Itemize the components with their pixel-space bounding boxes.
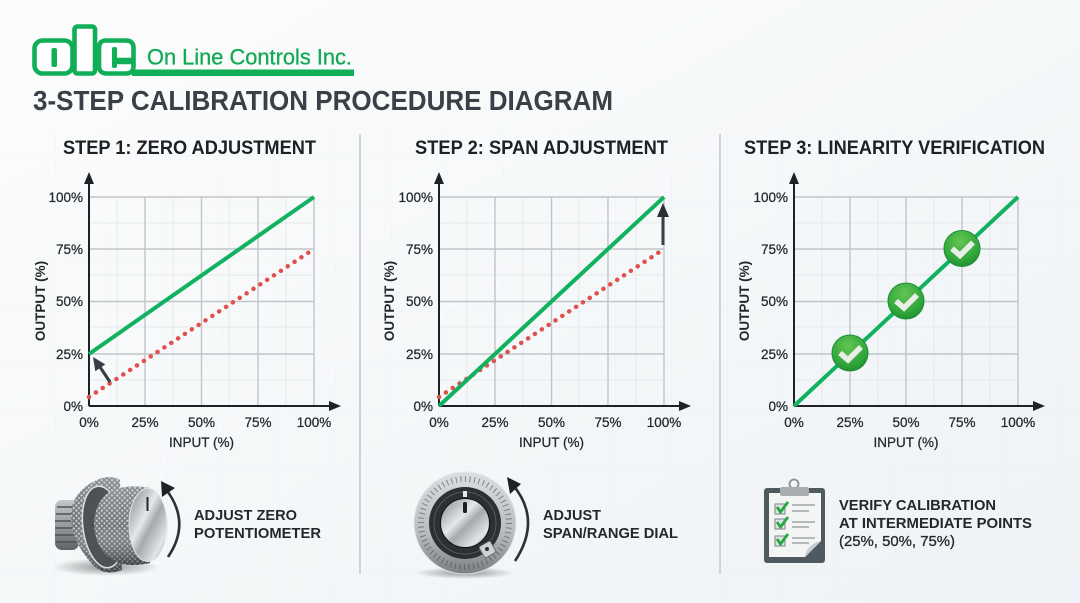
label: adjust zero potentiometer: POTENTIOMETER [194,525,321,542]
line: verified linear response [794,197,1018,406]
axis labels: 25% [56,347,83,362]
axis labels: 100% [48,190,83,205]
axis labels: 50% [56,294,83,309]
logo mark: olc [34,26,134,74]
axes [439,178,684,406]
title: 3-STEP CALIBRATION PROCEDURE DIAGRAM [33,85,613,116]
axes [89,178,334,406]
chart: step 1: 25% [131,415,159,430]
panel: step 2 span adjustment [382,138,691,579]
chart: step 3: 75% [948,415,976,430]
chart: step 1: 50% [188,415,215,430]
chart: step 3: 50% [892,415,920,430]
axis labels: 75% [406,242,433,257]
arrow: zero shift [93,357,110,382]
arrow: rotate clockwise [165,488,179,557]
axis labels: 75% [56,242,83,257]
axis labels: 0% [63,399,83,414]
label: verify calibration: VERIFY CALIBRATION [839,497,996,514]
label: adjust zero potentiometer: ADJUST ZERO [194,507,297,524]
chart: step 2: 75% [594,415,622,430]
heading: step 3: STEP 3: LINEARITY VERIFICATION [744,138,1045,159]
chart: step 2: 25% [481,415,509,430]
panel: step 1 zero adjustment [33,138,341,576]
chart: step 3 [737,172,1045,450]
axis labels: 25% [761,347,788,362]
chart: step 2: 50% [538,415,565,430]
logo underline [132,70,354,76]
chart: step 1: INPUT (%) [169,435,234,450]
chart: step 2: OUTPUT (%) [382,261,397,341]
chart: step 2: INPUT (%) [519,435,584,450]
chart: step 2: 0% [429,415,449,430]
label: verify calibration: (25%, 50%, 75%) [839,533,955,550]
chart: step 2 [382,172,691,450]
check: 50% point [888,283,924,319]
axis labels: 50% [406,294,433,309]
axis labels: 75% [761,242,788,257]
divider [359,134,361,574]
line: after adjustment [89,197,314,354]
logo: On Line Controls Inc. [34,26,354,76]
axis labels: 25% [406,347,433,362]
check: 75% point [944,230,980,266]
line: before adjustment [439,249,664,397]
chart: step 3: INPUT (%) [873,435,939,450]
axis labels: 50% [761,294,788,309]
chart: step 1: 0% [79,415,99,430]
logo wordmark: On Line Controls Inc. [147,44,352,70]
chart: step 3: 100% [1001,415,1035,430]
icon: span range dial [414,472,516,579]
axis labels: 0% [413,399,433,414]
label: adjust span/range dial: ADJUST [543,507,601,524]
axis labels: 0% [768,399,788,414]
chart: step 1: OUTPUT (%) [33,261,48,341]
axis labels: 100% [753,190,788,205]
chart: step 3: 0% [784,415,804,430]
label: adjust span/range dial: SPAN/RANGE DIAL [543,525,678,542]
chart: step 1: 100% [297,415,331,430]
heading: step 1: STEP 1: ZERO ADJUSTMENT [63,138,316,159]
icon: zero potentiometer knob [52,477,167,576]
arrow: span shift [657,203,669,245]
panel: step 3 linearity verification [737,138,1045,563]
axis labels [753,190,788,414]
chart: step 2: 100% [647,415,681,430]
chart: step 1 [33,172,341,450]
axes [794,178,1038,406]
axis labels [48,190,83,414]
line: after adjustment [439,197,664,406]
check: 25% point [832,335,868,371]
chart: step 1: 75% [244,415,272,430]
chart: step 3: 25% [836,415,864,430]
label: verify calibration: AT INTERMEDIATE POINTS [839,515,1032,532]
arrow: rotate dial [513,485,528,561]
line: before adjustment [89,249,314,397]
heading: step 2: STEP 2: SPAN ADJUSTMENT [415,138,668,159]
icon: checklist clipboard [764,480,825,563]
chart: step 3: OUTPUT (%) [737,261,752,341]
axis labels [398,190,433,414]
axis labels: 100% [398,190,433,205]
divider [719,134,721,574]
